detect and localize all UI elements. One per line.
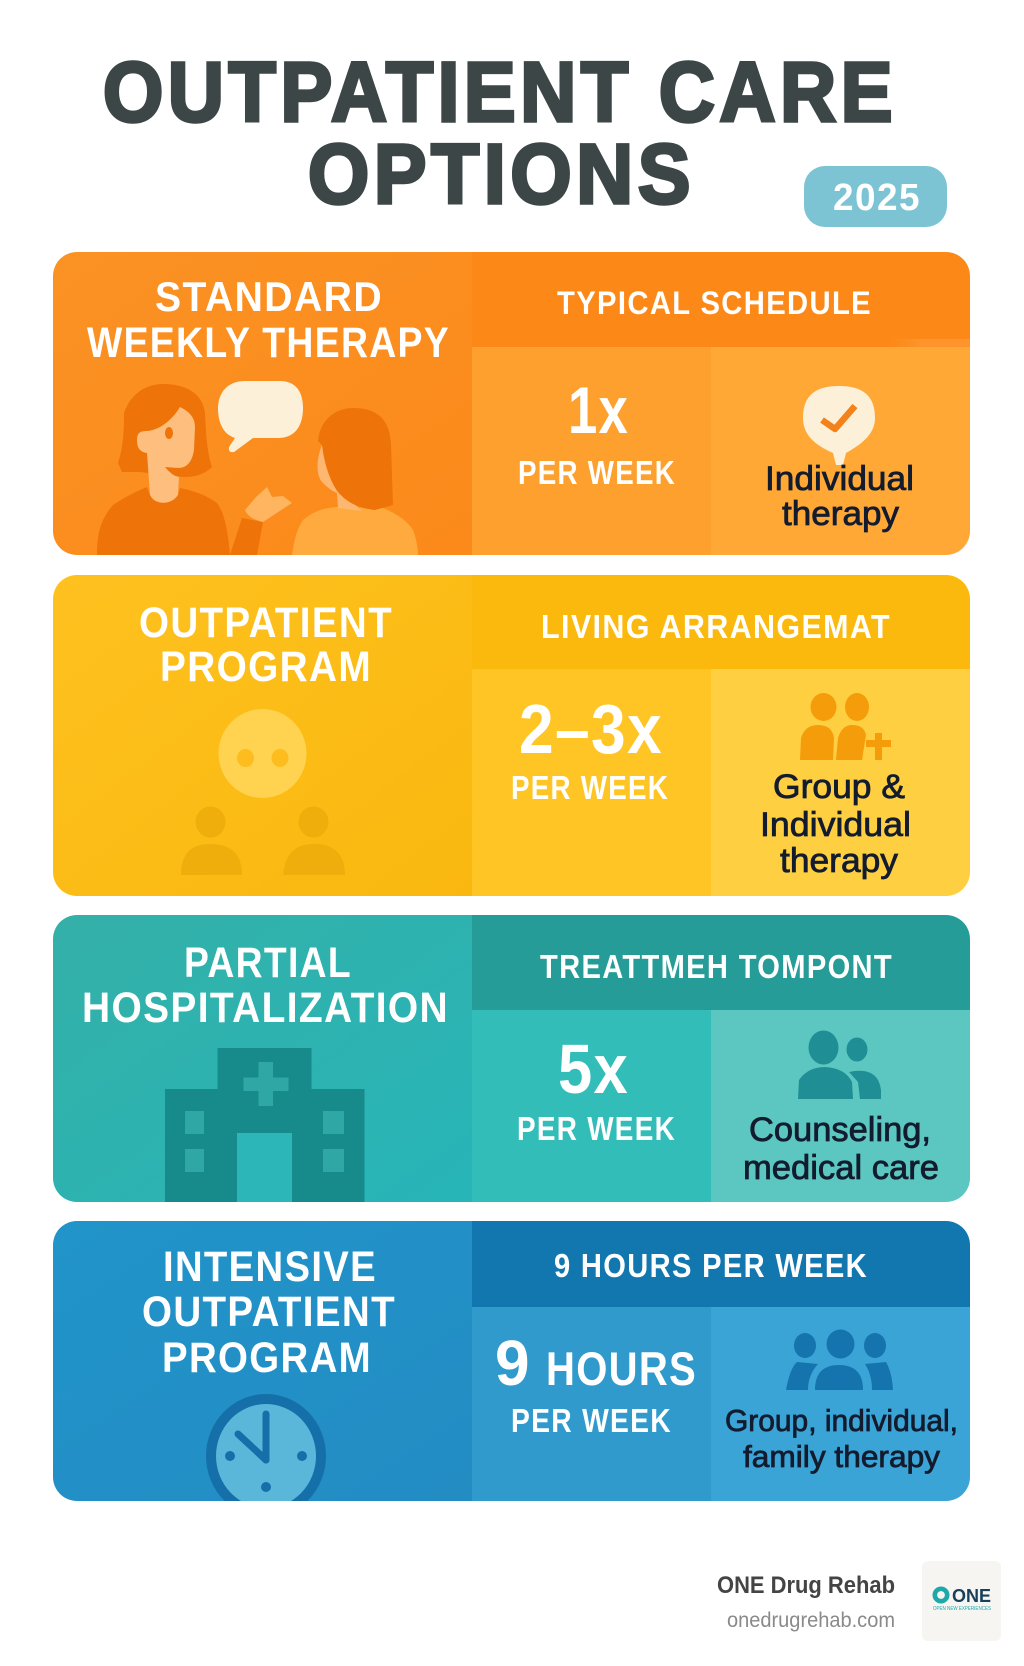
- heading: standard weekly therapy: STANDARD: [155, 273, 383, 320]
- stat: 5x per week: 5x: [558, 1030, 629, 1108]
- stat: 9 hours per week: PER WEEK: [511, 1402, 672, 1439]
- label: group, individual, family therapy: family therapy: [743, 1439, 941, 1474]
- panel: partial hospitalization: [53, 915, 970, 1202]
- heading: outpatient program: [140, 607, 392, 682]
- year badge: [804, 166, 947, 227]
- stat: 1x per week: 1x: [568, 373, 629, 447]
- label: group and individual therapy: [760, 768, 911, 880]
- label: group and individual therapy: therapy: [780, 842, 898, 880]
- panel: standard weekly therapy: [53, 252, 970, 555]
- heading: standard weekly therapy: WEEKLY THERAPY: [87, 319, 450, 367]
- heading: outpatient program: OUTPATIENT: [139, 599, 393, 647]
- stat: 9 hours per week: [497, 1340, 694, 1432]
- illustration: two people talking: [97, 381, 418, 555]
- stat: 5x per week: [518, 1044, 674, 1140]
- heading: partial hospitalization: [84, 948, 445, 1022]
- panel: intensive outpatient program: [53, 1221, 970, 1518]
- illustration: counselor with two people: [181, 709, 345, 875]
- logo: [922, 1561, 1001, 1641]
- stat: 9 hours per week: 9: [495, 1327, 531, 1399]
- label: group and individual therapy: Individual: [760, 806, 911, 844]
- footer: brand text: onedrugrehab.com: [727, 1609, 895, 1632]
- heading: outpatient program: PROGRAM: [160, 643, 372, 691]
- label: group, individual, family therapy: Group, individual,: [725, 1403, 958, 1438]
- header: typical schedule: TYPICAL SCHEDULE: [557, 285, 872, 321]
- label: counseling, medical care: medical care: [743, 1149, 939, 1187]
- header: living arrangemat: LIVING ARRANGEMAT: [541, 608, 891, 645]
- stat: 5x per week: PER WEEK: [517, 1110, 676, 1147]
- heading: partial hospitalization: PARTIAL: [184, 939, 352, 987]
- panel: outpatient program: [53, 575, 970, 896]
- heading: intensive outpatient program: INTENSIVE: [163, 1243, 377, 1291]
- icon: speech bubble with check: [803, 386, 875, 465]
- header: treattmeh tompont: TREATTMEH TOMPONT: [540, 948, 893, 985]
- icon: three people: [786, 1330, 893, 1390]
- heading: intensive outpatient program: [144, 1251, 394, 1372]
- heading: standard weekly therapy: [87, 282, 448, 358]
- logo: ONE: [952, 1586, 991, 1606]
- icon: two people: [798, 1030, 881, 1099]
- label: counseling, medical care: [744, 1116, 938, 1180]
- label: individual therapy: therapy: [782, 495, 899, 533]
- illustration: hospital building: [165, 1048, 364, 1202]
- heading: intensive outpatient program: OUTPATIENT: [142, 1288, 396, 1336]
- title: [103, 45, 897, 221]
- stat: 1x per week: [520, 388, 674, 484]
- logo: OPEN NEW EXPERIENCES: [933, 1606, 992, 1612]
- footer: brand text: [717, 1572, 895, 1632]
- heading: intensive outpatient program: PROGRAM: [162, 1334, 372, 1382]
- header: 9 hours per week: 9 HOURS PER WEEK: [554, 1247, 868, 1284]
- label: individual therapy: Individual: [765, 460, 914, 498]
- illustration: clock: [206, 1394, 326, 1501]
- title: OUTPATIENT CARE: [103, 45, 897, 139]
- label: group, individual, family therapy: [725, 1403, 958, 1474]
- label: individual therapy: [765, 460, 914, 533]
- label: counseling, medical care: Counseling,: [749, 1111, 931, 1149]
- label: group and individual therapy: Group &: [773, 768, 905, 806]
- heading: partial hospitalization: HOSPITALIZATION: [82, 984, 449, 1032]
- stat: 2-3x per week: PER WEEK: [511, 769, 669, 806]
- year badge: 2025: [833, 177, 921, 219]
- stat: 1x per week: PER WEEK: [518, 454, 676, 491]
- footer: brand text: ONE Drug Rehab: [717, 1572, 895, 1599]
- stat: 2-3x per week: 2–3x: [519, 690, 663, 768]
- stat: 9 hours per week: HOURS: [546, 1342, 697, 1395]
- title: OPTIONS: [308, 127, 695, 221]
- stat: 2-3x per week: [512, 704, 668, 799]
- icon: group with plus: [800, 693, 891, 760]
